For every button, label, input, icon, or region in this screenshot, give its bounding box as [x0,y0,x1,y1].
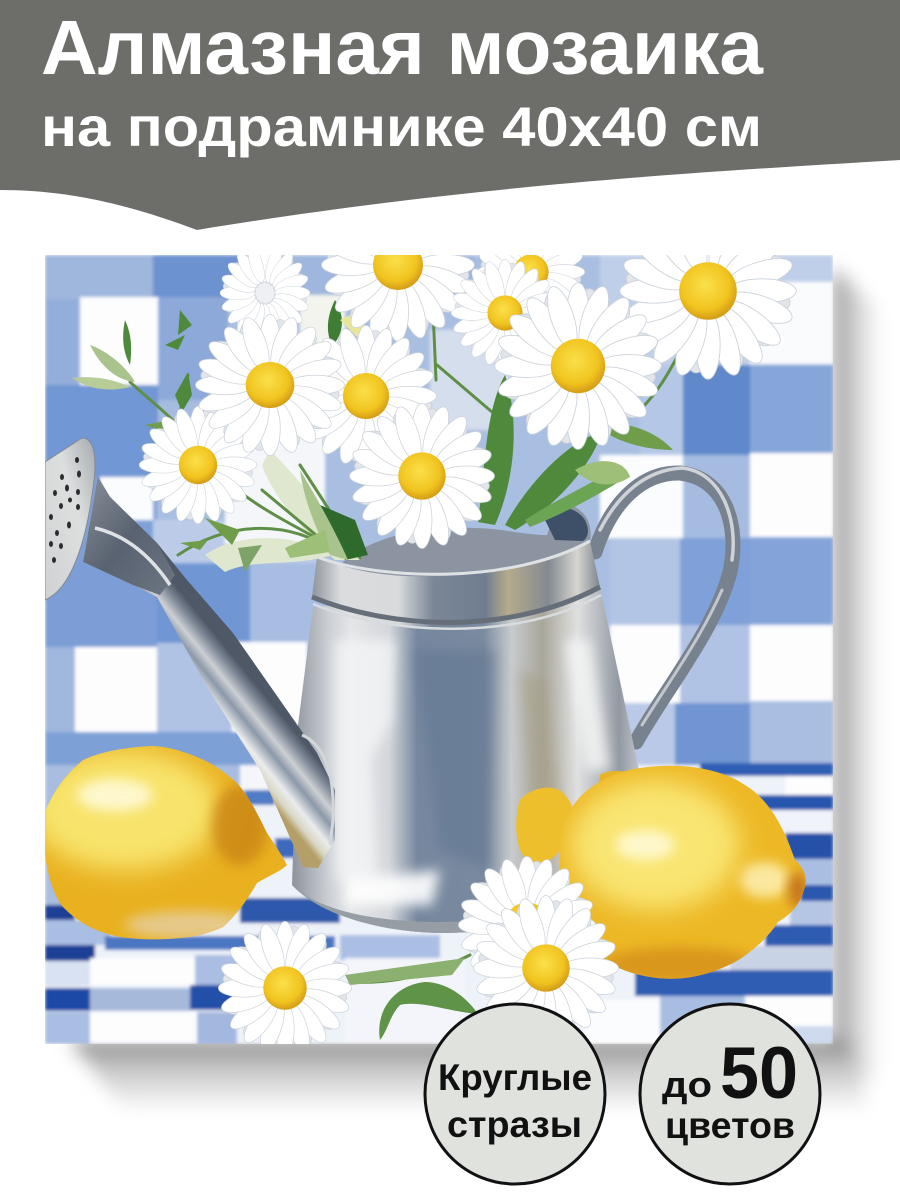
title: Алмазная мозаика [41,5,764,91]
daisy: bottom centre front [473,895,619,1041]
can collar [312,541,600,626]
daisy: lower centre [349,403,495,549]
badge: up to 50 colours: цветов [665,1105,795,1146]
daisy: left large [196,314,344,456]
foreground daisies [218,856,619,1055]
daisy bouquet [138,255,797,549]
stems and leaves [72,300,682,1040]
icon: watering can [45,438,733,945]
canvas drop shadow [70,268,880,1112]
badge: up to 50 colours [640,1004,820,1184]
can opening [340,507,591,576]
painting: daisies, watering can and lemons on gingham [45,255,833,1044]
can spout [83,477,335,868]
subtitle: на подрамнике 40х40 см [41,95,762,158]
gingham tablecloth background [45,255,833,1044]
can handle [595,468,733,742]
daisy: bottom left [218,921,352,1055]
daisy: right large [495,283,661,449]
can sprinkler head [45,438,95,600]
daisy: left small [139,406,257,524]
badge: round rhinestones [425,1004,605,1184]
badge: round rhinestones: стразы [447,1104,582,1145]
striped table cloth [45,763,833,1044]
daisy: top white back flower [220,255,310,332]
header banner [0,0,900,230]
small back lemon [516,771,628,863]
right lemon [555,760,810,985]
can body [292,587,640,933]
badge: up to 50 colours: до [662,1064,712,1105]
daisy: top small [478,255,585,300]
daisy: top right [620,255,797,380]
daisy: top centre [321,255,475,342]
daisy: bottom centre back [458,856,596,994]
badge: round rhinestones: Круглые [438,1057,592,1098]
left lemon [45,746,287,940]
daisy: small yellow centre [451,258,550,364]
daisy: centre behind [314,325,437,464]
badge: up to 50 colours: 50 [720,1033,798,1114]
can reflections [290,640,610,945]
